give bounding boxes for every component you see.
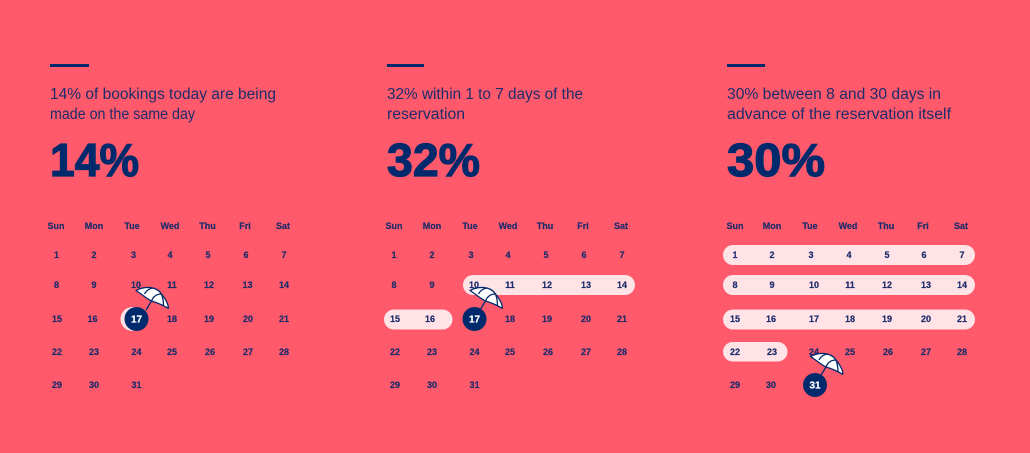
calendar: 10th to 16th highlighted: Sat (614, 221, 628, 231)
calendar: 17th only: 10 (131, 280, 141, 290)
calendar: 1st to 23rd highlighted: 15 (730, 314, 740, 324)
calendar: 10th to 16th highlighted: 26 (543, 347, 553, 357)
calendar: 10th to 16th highlighted: 18 (505, 314, 515, 324)
calendar: 1st to 23rd highlighted: 16 (766, 314, 776, 324)
calendar: 17th only: 21 (279, 314, 289, 324)
calendar: 17th only: 8 (54, 280, 59, 290)
calendar: 1st to 23rd highlighted: 7 (959, 250, 965, 260)
calendar: 1st to 23rd highlighted: 22 (730, 347, 740, 357)
calendar: 10th to 16th highlighted: 15 (390, 314, 400, 324)
calendar: 1st to 23rd highlighted: 6 (921, 250, 927, 260)
calendar: 10th to 16th highlighted: 24 (469, 347, 480, 357)
calendar: 17th only: 30 (89, 380, 99, 390)
calendar: 1st to 23rd highlighted (723, 221, 975, 397)
calendar: 1st to 23rd highlighted: 17 (809, 314, 819, 324)
calendar: 17th only: 29 (52, 380, 62, 390)
calendar: 10th to 16th highlighted: 14 (617, 280, 627, 290)
calendar: 10th to 16th highlighted: Fri (577, 221, 589, 231)
description text: advance of the reservation itself (727, 106, 952, 123)
calendar: 1st to 23rd highlighted: 30 (766, 380, 776, 390)
panel: same-day bookings (48, 64, 290, 390)
calendar: 10th to 16th highlighted: 17 (469, 314, 480, 326)
calendar: 10th to 16th highlighted: 7 (619, 250, 625, 260)
calendar: 1st to 23rd highlighted: 11 (845, 280, 855, 290)
calendar: 17th only: 17 (131, 314, 142, 326)
calendar: 17th only: 20 (243, 314, 253, 324)
calendar: 10th to 16th highlighted: 29 (390, 380, 400, 390)
calendar: 17th only: 18 (167, 314, 177, 324)
description text: made on the same day (50, 106, 195, 123)
calendar: 17th only: 15 (52, 314, 62, 324)
calendar: 1st to 23rd highlighted: 26 (883, 347, 893, 357)
calendar: 17th only (48, 221, 290, 390)
calendar: 10th to 16th highlighted: 1 (391, 250, 397, 260)
calendar: 17th only: 31 (131, 380, 142, 390)
calendar: 17th only: 2 (91, 250, 97, 260)
calendar: 10th to 16th highlighted: 8 (391, 280, 397, 290)
calendar: 17th only: 13 (242, 280, 253, 290)
calendar: 1st to 23rd highlighted: Fri (917, 221, 929, 231)
calendar: 1st to 23rd highlighted: Mon (763, 221, 781, 231)
calendar: 1st to 23rd highlighted: 5 (884, 250, 890, 260)
calendar: 1st to 23rd highlighted: 2 (769, 250, 775, 260)
calendar: 1st to 23rd highlighted: Sat (954, 221, 968, 231)
calendar: 1st to 23rd highlighted: 8 (732, 280, 738, 290)
calendar: 17th only: 6 (243, 250, 249, 260)
calendar: 10th to 16th highlighted: 13 (581, 280, 591, 290)
calendar: 1st to 23rd highlighted: Sun (726, 221, 744, 231)
calendar: 17th only: 5 (205, 250, 211, 260)
calendar: 10th to 16th highlighted: 16 (425, 314, 435, 324)
calendar: 10th to 16th highlighted: 20 (581, 314, 591, 324)
panel: 8 to 30 days (723, 64, 975, 397)
calendar: 1st to 23rd highlighted: 9 (769, 280, 775, 290)
calendar: 10th to 16th highlighted: 28 (617, 347, 627, 357)
calendar: 10th to 16th highlighted: 19 (542, 314, 552, 324)
calendar: 1st to 23rd highlighted: 23 (767, 347, 777, 357)
big percentage: 14%: 14% (50, 134, 139, 186)
calendar: 1st to 23rd highlighted: 27 (921, 347, 931, 357)
calendar: 10th to 16th highlighted: 10 (469, 280, 479, 290)
calendar: 17th only: 24 (131, 347, 142, 357)
description text (387, 86, 583, 123)
calendar: 17th only: 1 (54, 250, 59, 260)
calendar: 1st to 23rd highlighted: 21 (957, 314, 967, 324)
calendar: 1st to 23rd highlighted: 3 (808, 250, 814, 260)
calendar: 10th to 16th highlighted: 25 (505, 347, 515, 357)
description text: reservation (387, 106, 465, 123)
description text: 30% between 8 and 30 days in (727, 86, 941, 103)
calendar: 10th to 16th highlighted: 5 (543, 250, 549, 260)
calendar: 1st to 23rd highlighted: 25 (845, 347, 855, 357)
calendar: 17th only: 12 (204, 280, 214, 290)
calendar: 10th to 16th highlighted: 27 (581, 347, 591, 357)
calendar: 17th only: Sun (48, 221, 64, 231)
calendar: 17th only: 3 (131, 250, 136, 260)
calendar: 17th only: 23 (89, 347, 99, 357)
calendar: 10th to 16th highlighted: 6 (581, 250, 587, 260)
calendar: 10th to 16th highlighted: 21 (617, 314, 627, 324)
calendar: 17th only: 14 (279, 280, 289, 290)
calendar: 10th to 16th highlighted: Wed (499, 221, 517, 231)
calendar: 1st to 23rd highlighted: 18 (845, 314, 855, 324)
calendar: 1st to 23rd highlighted: 14 (957, 280, 967, 290)
calendar: 10th to 16th highlighted: 11 (505, 280, 515, 290)
calendar: 10th to 16th highlighted: 2 (429, 250, 435, 260)
calendar: 1st to 23rd highlighted: 24 (809, 347, 819, 357)
calendar: 10th to 16th highlighted: 31 (469, 380, 480, 390)
calendar: 10th to 16th highlighted: 30 (427, 380, 437, 390)
calendar: 10th to 16th highlighted (384, 221, 635, 390)
accent bar (727, 64, 765, 67)
calendar: 17th only: 22 (52, 347, 62, 357)
calendar: 1st to 23rd highlighted: 20 (921, 314, 931, 324)
calendar: 17th only: 25 (167, 347, 177, 357)
description text (727, 86, 952, 123)
calendar: 10th to 16th highlighted: Mon (423, 221, 441, 231)
description text: 32% within 1 to 7 days of the (387, 86, 583, 103)
calendar: 10th to 16th highlighted: 3 (468, 250, 474, 260)
icon: umbrella (810, 353, 843, 376)
calendar: 17th only: 9 (91, 280, 97, 290)
calendar: 17th only: 19 (204, 314, 214, 324)
icon: umbrella (136, 287, 168, 310)
calendar: 1st to 23rd highlighted: Tue (802, 221, 818, 231)
calendar: 17th only: 27 (243, 347, 253, 357)
icon: umbrella (470, 287, 502, 310)
calendar: 10th to 16th highlighted: 22 (390, 347, 400, 357)
calendar: 1st to 23rd highlighted: Wed (839, 221, 857, 231)
calendar: 17th only: 26 (205, 347, 215, 357)
calendar: 17th only: Sat (276, 221, 290, 231)
calendar: 1st to 23rd highlighted: 12 (882, 280, 892, 290)
calendar: 1st to 23rd highlighted: 29 (730, 380, 740, 390)
accent bar (50, 64, 89, 67)
calendar: 10th to 16th highlighted: 23 (427, 347, 437, 357)
calendar: 10th to 16th highlighted: Thu (537, 221, 553, 231)
calendar: 10th to 16th highlighted: Tue (462, 221, 478, 231)
calendar: 1st to 23rd highlighted: Thu (878, 221, 894, 231)
panel: 1 to 7 days (384, 64, 635, 390)
description text: 14% of bookings today are being (50, 86, 276, 103)
calendar: 1st to 23rd highlighted: 13 (921, 280, 931, 290)
big percentage: 30%: 30% (727, 134, 825, 186)
calendar: 17th only: 28 (279, 347, 289, 357)
calendar: 17th only: Wed (161, 221, 179, 231)
description text (50, 86, 276, 123)
calendar: 17th only: Tue (124, 221, 140, 231)
calendar: 10th to 16th highlighted: 12 (542, 280, 552, 290)
calendar: 1st to 23rd highlighted: 10 (809, 280, 819, 290)
calendar: 17th only: Thu (199, 221, 216, 231)
calendar: 10th to 16th highlighted: 4 (505, 250, 511, 260)
calendar: 1st to 23rd highlighted: 28 (957, 347, 967, 357)
calendar: 1st to 23rd highlighted: 31 (809, 380, 821, 392)
calendar: 17th only: Mon (85, 221, 103, 231)
calendar: 10th to 16th highlighted: 9 (429, 280, 435, 290)
calendar: 1st to 23rd highlighted: 1 (732, 250, 738, 260)
calendar: 1st to 23rd highlighted: 4 (846, 250, 852, 260)
calendar: 1st to 23rd highlighted: 19 (882, 314, 892, 324)
big percentage: 32%: 32% (387, 134, 480, 186)
calendar: 10th to 16th highlighted: Sun (386, 221, 402, 231)
calendar: 17th only: 16 (87, 314, 98, 324)
calendar: 17th only: Fri (239, 221, 251, 231)
calendar: 17th only: 7 (281, 250, 287, 260)
accent bar (387, 64, 424, 67)
calendar: 17th only: 11 (167, 280, 177, 290)
calendar: 17th only: 4 (167, 250, 173, 260)
